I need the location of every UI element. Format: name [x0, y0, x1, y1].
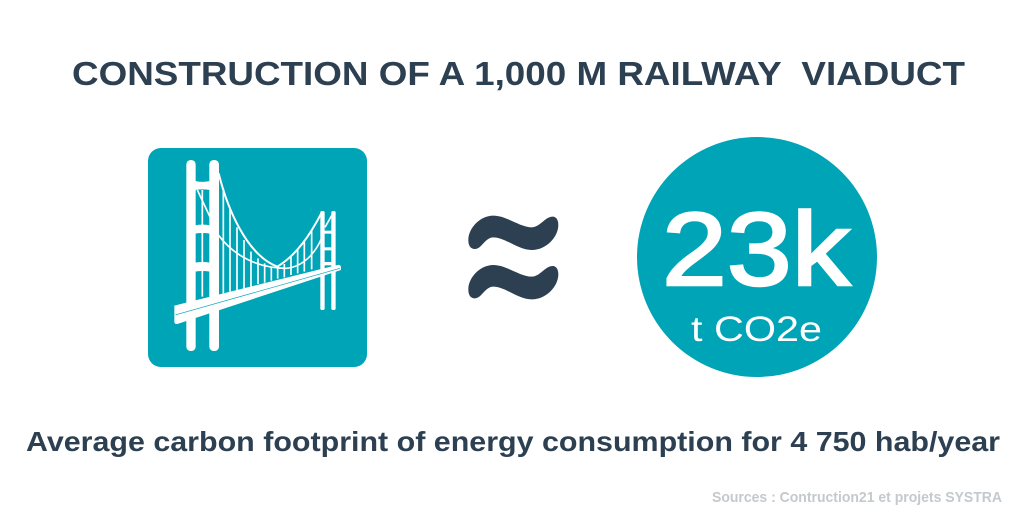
left towers	[186, 160, 219, 351]
unit: t CO2e	[691, 310, 822, 349]
deck	[174, 265, 341, 324]
icon: suspension bridge	[148, 148, 367, 367]
circle: carbon figure	[637, 137, 877, 377]
upper wave	[468, 216, 558, 250]
lower wave	[468, 265, 558, 299]
right towers	[320, 211, 336, 310]
value: 23k	[662, 192, 851, 308]
source note: Sources : Contruction21 et projets SYSTRA	[712, 489, 1002, 506]
bridge drawing	[174, 160, 341, 351]
subtitle: Average carbon footprint of energy consumption for 4 750 hab/year	[26, 426, 1000, 457]
icon background	[148, 148, 367, 367]
cables and hangers	[197, 173, 332, 297]
title: CONSTRUCTION OF A 1,000 M RAILWAY VIADUCT	[72, 56, 966, 93]
circle background	[637, 137, 877, 377]
icon: approximately equal sign	[468, 216, 558, 299]
